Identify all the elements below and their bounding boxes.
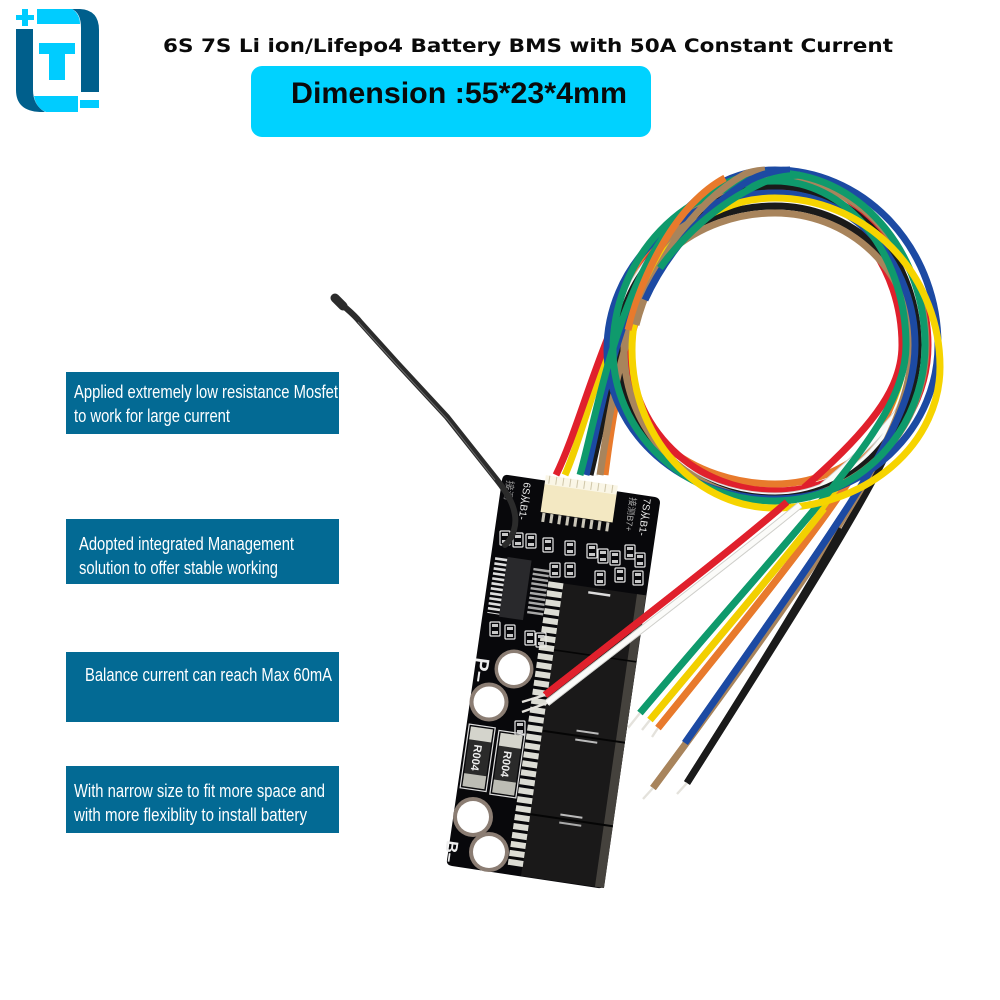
wire: green	[580, 173, 925, 713]
board silkscreen labels	[440, 480, 652, 864]
shunt resistors: R004	[468, 744, 483, 772]
connector	[540, 475, 618, 527]
wire: yellow strand	[565, 181, 905, 720]
mosfet panels	[458, 556, 649, 888]
small components	[490, 531, 645, 735]
feature box 1: to work for large current	[74, 406, 230, 426]
board silkscreen labels: B–	[440, 839, 462, 864]
thermistor probe	[335, 298, 515, 545]
upper strands crossing the loop	[628, 170, 800, 330]
wire: blue	[586, 170, 938, 743]
feature box 3	[66, 652, 339, 722]
wire: yellow loop	[632, 198, 940, 508]
BMS circuit board	[440, 475, 660, 888]
feature box 3: Balance current can reach Max 60mA	[85, 665, 332, 685]
feature box 2: Adopted integrated Management	[79, 534, 294, 554]
wire: orange	[605, 175, 915, 728]
board silkscreen labels: 6S从B1-	[516, 482, 532, 521]
wire: brown	[600, 178, 926, 788]
logo	[16, 9, 99, 112]
dimension banner: Dimension :55*23*4mm	[291, 77, 627, 110]
wire harness	[522, 170, 940, 799]
shunt resistors: R004	[497, 750, 513, 779]
title: 6S 7S Li ion/Lifepo4 Battery BMS with 50A Constant Current	[163, 35, 893, 57]
solder holes	[453, 650, 534, 872]
dimension banner	[251, 66, 651, 137]
feature box 4	[66, 766, 339, 833]
board silkscreen labels: 接测B7+	[623, 497, 639, 532]
bare wire tips	[522, 695, 687, 799]
feature box 4: with more flexiblity to install battery	[73, 805, 307, 825]
feature box 1	[66, 372, 339, 434]
free wire ends	[545, 502, 842, 788]
feature box 1: Applied extremely low resistance Mosfet	[74, 382, 338, 402]
wire: white	[547, 183, 925, 703]
board silkscreen labels: 7S从B1-	[636, 498, 652, 537]
wire: black	[590, 186, 918, 783]
board silkscreen labels: 接测	[501, 480, 517, 501]
feature box 4: With narrow size to fit more space and	[74, 781, 325, 801]
shunt resistors	[460, 724, 525, 798]
wire: red	[545, 188, 928, 695]
board silkscreen labels: P–	[468, 656, 493, 684]
feature box 2: solution to offer stable working	[79, 558, 278, 578]
feature box 2	[66, 519, 339, 584]
